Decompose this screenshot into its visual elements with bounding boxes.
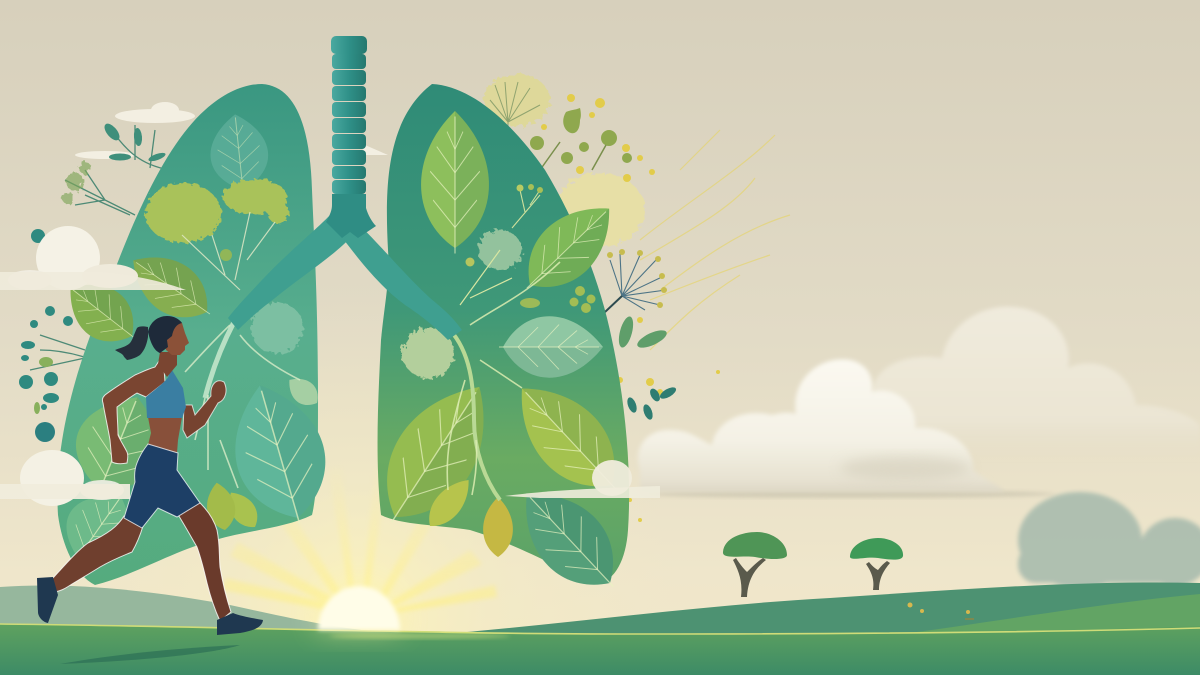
streaks of pollen xyxy=(640,130,790,350)
cloud: left upper over lung xyxy=(0,226,186,290)
right lung: yellow leaves xyxy=(420,472,479,534)
cloud: large pale upper right xyxy=(870,307,1200,460)
left lung: lower teal leaf xyxy=(50,478,148,579)
near right hill xyxy=(850,594,1200,660)
right lung: seed sprig xyxy=(512,184,543,228)
right lung: diagonal leaf xyxy=(507,188,629,309)
hills xyxy=(0,582,1200,675)
cloud: left lower over lung xyxy=(0,450,130,506)
umbel top xyxy=(484,74,550,135)
sun rays xyxy=(222,468,497,615)
far left hill xyxy=(0,586,420,636)
tree: right xyxy=(850,538,903,590)
left lung xyxy=(50,84,342,585)
right lung: bottom teal leaf xyxy=(502,471,638,609)
ponytail xyxy=(115,326,148,360)
right lung: pale horizontal leaf xyxy=(499,316,603,378)
left lung: green leaf xyxy=(119,239,225,335)
right lung: small flower sprig xyxy=(460,230,522,305)
right lung xyxy=(358,84,640,609)
left lung: behind-runner leaf xyxy=(60,382,176,509)
plants: left sprays xyxy=(19,121,205,442)
left lung: upper leaf xyxy=(206,111,272,196)
distant clouds xyxy=(75,102,1200,588)
left lung: pale flower xyxy=(251,302,303,354)
right lung: pale flower cluster xyxy=(402,328,454,378)
left lung: outer leaf xyxy=(55,268,150,358)
shorts xyxy=(124,444,200,528)
cloud: white centre right xyxy=(638,359,1055,498)
right lung: seed pods xyxy=(570,286,596,313)
trachea and bronchi xyxy=(185,36,560,500)
left lung: large teal leaf xyxy=(217,373,342,535)
hair xyxy=(148,316,182,353)
leaves lower right spray xyxy=(600,315,678,421)
back shoe xyxy=(37,577,58,623)
cloud: over right lung xyxy=(505,460,660,498)
torso xyxy=(148,417,182,453)
back leg xyxy=(52,516,143,592)
tree: left xyxy=(723,532,787,597)
runner xyxy=(37,316,263,635)
right lung: lower-right leaf xyxy=(497,366,640,512)
head and neck xyxy=(158,352,177,377)
cloud: behind lungs xyxy=(75,102,388,159)
left lung: small yellow leaves xyxy=(221,486,265,534)
far right hill xyxy=(420,582,1200,660)
runner shadow xyxy=(60,645,240,664)
back arm xyxy=(102,355,165,464)
front arm xyxy=(183,381,226,438)
plants: right sprays xyxy=(484,74,790,522)
spray upper left xyxy=(30,125,170,372)
front shoe xyxy=(217,613,263,635)
big pale flower xyxy=(555,173,645,247)
front ground xyxy=(0,624,1200,675)
cloud: grey green far right xyxy=(1018,492,1200,588)
trachea rings xyxy=(326,36,376,238)
sun xyxy=(318,586,510,639)
sun glow xyxy=(0,270,800,670)
front leg xyxy=(177,500,231,621)
left lung: moss clusters xyxy=(145,179,288,243)
bronchus right xyxy=(344,222,560,500)
right lung: large lower-left leaf xyxy=(358,365,513,544)
right lung: top leaf xyxy=(421,111,489,253)
ground specks xyxy=(908,602,974,620)
starburst umbel xyxy=(605,254,666,312)
bronchus left xyxy=(185,208,352,488)
sports top xyxy=(146,367,186,418)
